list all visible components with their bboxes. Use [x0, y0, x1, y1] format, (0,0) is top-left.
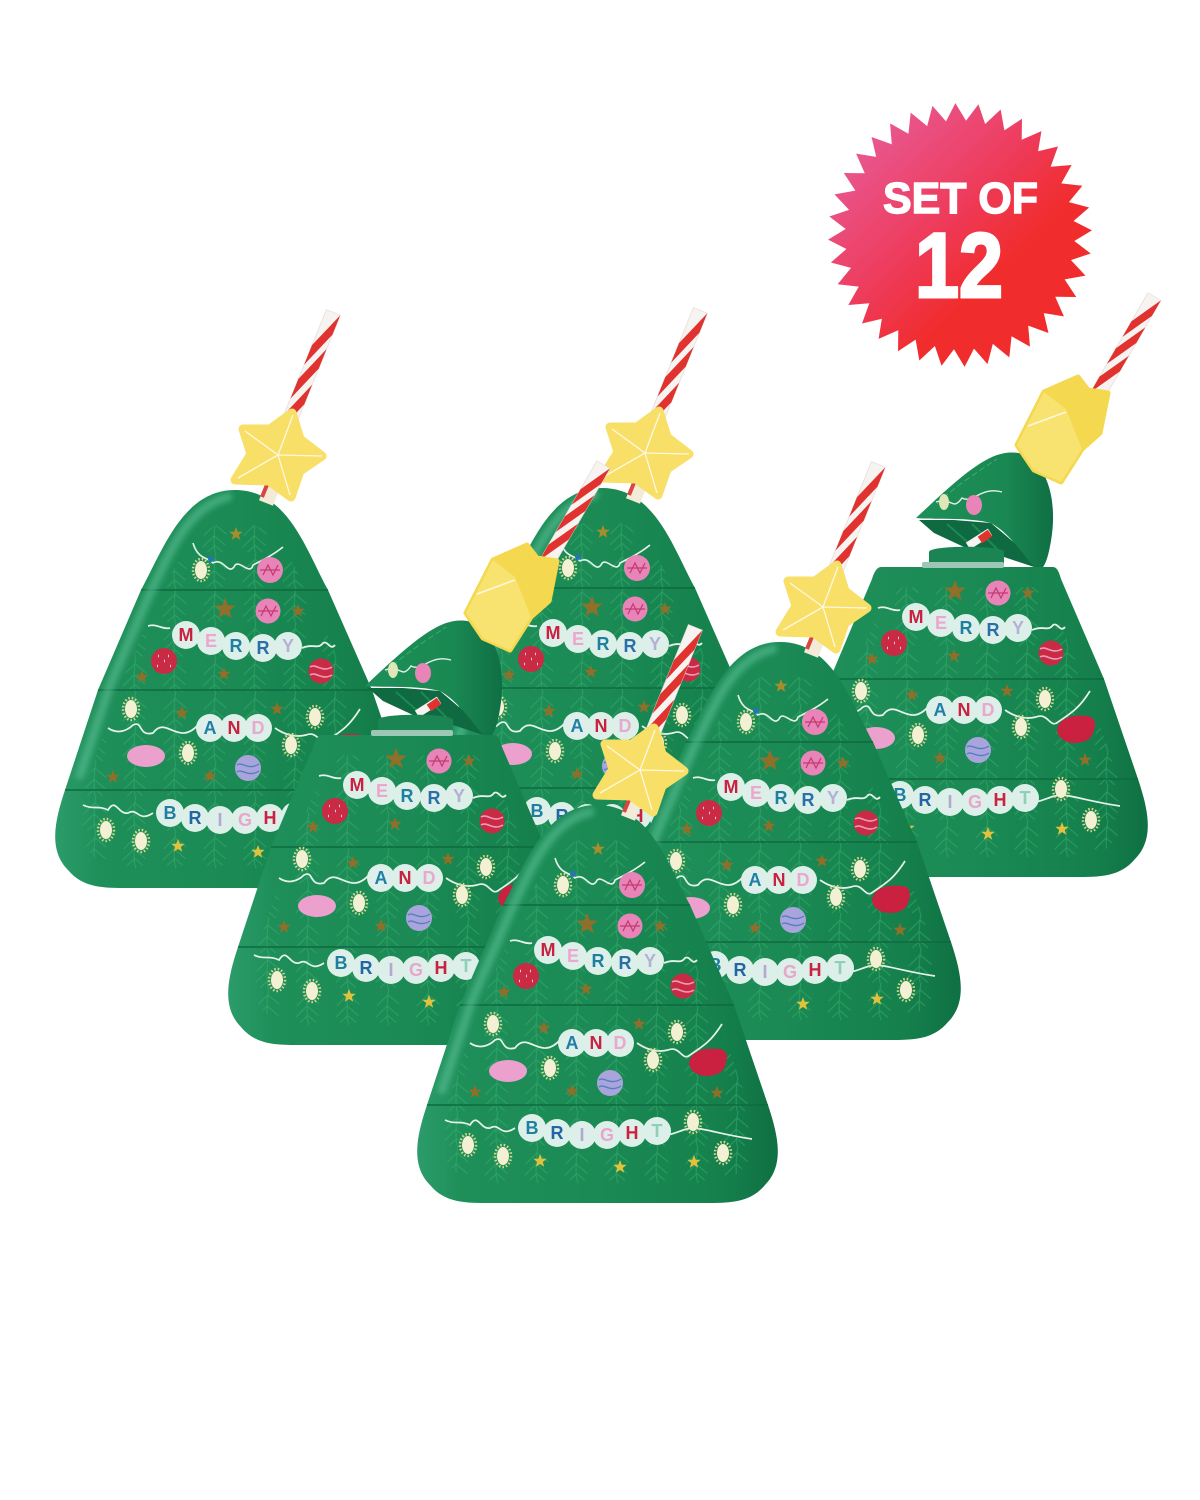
tree: middle left with open lid	[228, 461, 610, 1045]
tree: back right with open lid: B R I G H T	[894, 785, 1030, 812]
tree: middle left with open lid: M E R R Y	[350, 775, 465, 808]
tree: back left closed: A N D	[204, 718, 264, 738]
tree: back right with open lid	[787, 293, 1161, 877]
tree: front centre closed	[417, 625, 778, 1203]
badge: set of 12 starburst: SET OF	[883, 174, 1038, 223]
tree: back left closed	[55, 310, 416, 888]
tree: back right with open lid: A N D	[934, 700, 994, 720]
tree: middle right closed: B R I G H T	[708, 955, 846, 982]
tree: back centre closed: B R I G H T	[530, 801, 668, 828]
badge: set of 12 starburst	[823, 98, 1097, 372]
tree: middle right closed	[600, 462, 961, 1040]
tree: front centre closed: B R I G H T	[526, 1118, 662, 1145]
tree: back right with open lid: M E R R Y	[908, 607, 1024, 640]
badge: set of 12 starburst: 12	[915, 215, 1003, 317]
tree: front centre closed: M E R R Y	[540, 940, 656, 973]
tree: middle right closed: A N D	[748, 870, 810, 890]
tree: back left closed: M E R R Y	[178, 625, 294, 658]
tree: back centre closed	[422, 308, 783, 886]
tree: back centre closed: A N D	[570, 716, 632, 736]
tree: middle right closed: M E R R Y	[724, 777, 839, 810]
tree: back centre closed: M E R R Y	[546, 623, 661, 656]
tree: front centre closed: A N D	[566, 1033, 626, 1053]
tree: middle left with open lid: B R I G H T	[334, 953, 472, 980]
tree: middle left with open lid: A N D	[374, 868, 436, 888]
tree: back left closed: B R I G H T	[164, 803, 300, 830]
